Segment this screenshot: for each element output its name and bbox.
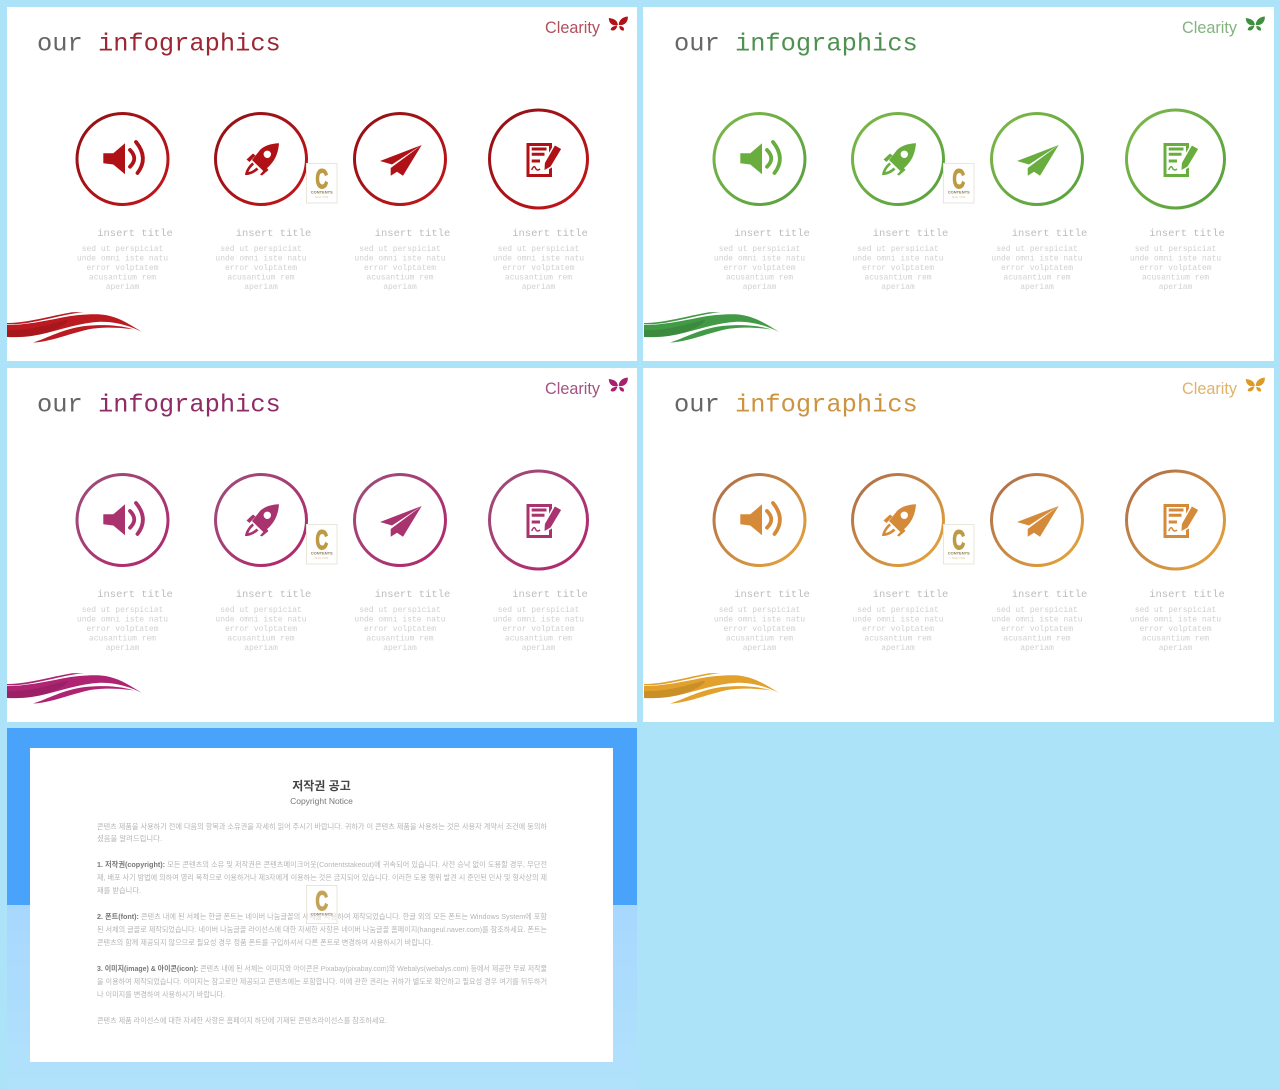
item text: sed ut perspiciat <box>1135 245 1216 254</box>
icon circle <box>77 474 168 566</box>
icon circle <box>992 474 1082 566</box>
item text: unde omni iste natu <box>77 255 168 264</box>
watermark: CONTENTS <box>311 912 333 916</box>
item text: acusantium rem <box>227 634 295 643</box>
item text: error volptatem <box>364 264 436 273</box>
item text: sed ut perspiciat <box>220 245 302 254</box>
item text: acusantium rem <box>1142 273 1209 282</box>
item text: unde omni iste natu <box>991 255 1083 264</box>
item title: insert title <box>375 589 450 601</box>
icon circle <box>490 471 588 569</box>
notice body text: 3. 이미지(image) & 아이콘(icon): 콘텐츠 내에 된 서체는 이미지와 아이콘은 Pixabay(pixabay.com)와 Webalys(webalys.com) 등에서 제공한 무료 저작물 <box>97 964 547 973</box>
logo icon <box>609 16 628 31</box>
item text: aperiam <box>881 644 915 653</box>
item text: sed ut perspiciat <box>359 245 441 254</box>
item title: insert title <box>236 228 311 240</box>
item 1: speaker <box>714 114 810 292</box>
notice body text: 콘텐츠 제품을 사용하기 전에 다음의 항목과 소유권을 자세히 읽어 주시기 바랍니다. 귀하가 이 콘텐츠 제품을 사용하는 것은 사용자 계약서 조건에 동의하 <box>97 822 547 831</box>
notice body text: 셨음을 알려드립니다. <box>97 834 162 843</box>
item text: aperiam <box>1020 283 1054 292</box>
item text: unde omni iste natu <box>354 255 446 264</box>
item text: error volptatem <box>1139 264 1212 273</box>
panel: red slide <box>7 7 637 361</box>
item title: insert title <box>873 589 948 601</box>
item text: sed ut perspiciat <box>719 245 800 254</box>
item title: insert title <box>1012 589 1087 601</box>
item text: unde omni iste natu <box>354 616 446 625</box>
title: our infographics <box>37 390 281 420</box>
item title: insert title <box>1149 589 1225 601</box>
notice body text: 1. 저작권(copyright): 모든 콘텐츠의 소유 및 저작권은 콘텐츠메이크어웃(Contentstakeout)에 귀속되어 있습니다. 사전 승낙 없이 도용할 경우, 무단전 <box>97 860 547 869</box>
item text: aperiam <box>106 283 140 292</box>
icon: rocket <box>245 504 279 536</box>
item text: error volptatem <box>723 264 796 273</box>
item text: error volptatem <box>862 625 934 634</box>
icon circle <box>216 474 306 566</box>
item text: unde omni iste natu <box>1130 616 1221 625</box>
item text: error volptatem <box>502 264 575 273</box>
item text: aperiam <box>244 283 278 292</box>
item text: aperiam <box>881 283 915 292</box>
item text: acusantium rem <box>366 634 434 643</box>
notice body text: 콘텐츠의 함께 제공되지 않으므로 필요성 경우 정품 폰트를 구입하셔서 다른 폰트로 변경하여 사용하시기 바랍니다. <box>97 938 433 947</box>
icon circle <box>852 474 944 566</box>
icon: paper plane <box>1017 506 1059 537</box>
icon circle <box>714 474 805 566</box>
icon circle <box>490 110 588 208</box>
item text: sed ut perspiciat <box>857 245 939 254</box>
swoosh <box>7 673 142 704</box>
icon circle <box>216 114 306 204</box>
item text: unde omni iste natu <box>493 616 584 625</box>
item text: unde omni iste natu <box>852 255 944 264</box>
swoosh <box>7 312 142 342</box>
logo text: Clearity <box>1182 18 1237 37</box>
icon: paper plane <box>1017 145 1059 176</box>
item title: insert title <box>1012 228 1087 240</box>
icon circle <box>852 114 944 204</box>
item text: aperiam <box>522 644 556 653</box>
title: our infographics <box>674 390 918 420</box>
watermark: C <box>316 886 328 916</box>
item 2: rocket <box>852 474 948 653</box>
item text: aperiam <box>383 283 417 292</box>
item 3: paper plane <box>354 474 450 653</box>
item text: error volptatem <box>86 264 159 273</box>
notice heading: 저작권 공고 <box>292 778 351 793</box>
icon: document <box>1164 143 1198 177</box>
item text: sed ut perspiciat <box>498 606 579 615</box>
item text: aperiam <box>1159 644 1192 653</box>
item text: sed ut perspiciat <box>498 245 579 254</box>
item text: sed ut perspiciat <box>220 606 302 615</box>
watermark <box>306 164 337 203</box>
item text: error volptatem <box>723 625 796 634</box>
item title: insert title <box>734 228 810 240</box>
item text: acusantium rem <box>726 634 793 643</box>
item 3: paper plane <box>354 114 450 292</box>
item 4: document <box>1126 471 1225 653</box>
item text: error volptatem <box>86 625 159 634</box>
item text: acusantium rem <box>864 634 932 643</box>
item text: sed ut perspiciat <box>82 606 163 615</box>
item text: error volptatem <box>1139 625 1212 634</box>
icon: speaker <box>740 142 780 174</box>
icon circle <box>992 114 1082 204</box>
logo text: Clearity <box>1182 379 1237 398</box>
notice body text: 재를 받습니다. <box>97 886 141 895</box>
item title: insert title <box>97 228 173 240</box>
icon: rocket <box>245 143 279 176</box>
logo icon <box>1246 378 1265 392</box>
logo text: Clearity <box>545 18 600 37</box>
item text: aperiam <box>743 283 776 292</box>
item text: unde omni iste natu <box>714 255 805 264</box>
logo icon <box>609 378 628 392</box>
item text: acusantium rem <box>89 273 156 282</box>
item 1: speaker <box>714 474 810 653</box>
item text: acusantium rem <box>366 273 434 282</box>
item text: sed ut perspiciat <box>996 245 1078 254</box>
item 4: document <box>490 110 588 292</box>
item text: aperiam <box>1159 283 1192 292</box>
item text: acusantium rem <box>505 273 572 282</box>
icon: rocket <box>882 143 916 176</box>
icon circle <box>714 114 805 204</box>
item text: aperiam <box>383 644 417 653</box>
icon: speaker <box>103 503 143 535</box>
item title: insert title <box>97 589 173 601</box>
item 2: rocket <box>215 474 311 653</box>
icon circle <box>77 114 168 204</box>
item text: unde omni iste natu <box>714 616 805 625</box>
item text: acusantium rem <box>1003 634 1071 643</box>
item text: acusantium rem <box>864 273 932 282</box>
notice body text: 콘텐츠 제품 라이선스에 대한 자세한 사항은 홈페이지 하단에 기재된 콘텐츠라이선스를 참조하세요. <box>97 1016 387 1025</box>
item text: acusantium rem <box>227 273 295 282</box>
icon circle <box>354 114 446 204</box>
icon: paper plane <box>380 145 422 176</box>
item text: unde omni iste natu <box>493 255 584 264</box>
item text: unde omni iste natu <box>991 616 1083 625</box>
item text: error volptatem <box>225 625 297 634</box>
item 2: rocket <box>852 114 948 292</box>
item text: sed ut perspiciat <box>1135 606 1216 615</box>
notice body text <box>97 822 547 1025</box>
item title: insert title <box>1149 228 1225 240</box>
item text: aperiam <box>106 644 140 653</box>
watermark <box>944 524 974 564</box>
logo text: Clearity <box>545 379 600 398</box>
item text: error volptatem <box>502 625 575 634</box>
watermark <box>944 164 974 203</box>
notice body text: 을 이용하여 제작되었습니다. 이미지는 참고로만 제공되고 콘텐츠에는 포함합니다. 이에 관한 권리는 귀하가 별도로 확인하고 필요성 경우 여기를 뒤두하거 <box>97 977 547 986</box>
item 1: speaker <box>77 474 173 653</box>
icon: speaker <box>103 142 143 174</box>
icon circle <box>1126 110 1224 208</box>
item title: insert title <box>734 589 810 601</box>
item text: acusantium rem <box>1003 273 1071 282</box>
item 3: paper plane <box>991 114 1087 292</box>
swoosh <box>644 673 779 704</box>
item text: sed ut perspiciat <box>359 606 441 615</box>
item text: unde omni iste natu <box>215 255 307 264</box>
item title: insert title <box>512 228 588 240</box>
icon: document <box>526 504 561 538</box>
logo icon <box>1246 16 1265 31</box>
item text: acusantium rem <box>1142 634 1209 643</box>
swoosh <box>644 312 779 342</box>
item text: aperiam <box>522 283 556 292</box>
item text: acusantium rem <box>726 273 793 282</box>
item text: aperiam <box>1020 644 1054 653</box>
item text: error volptatem <box>364 625 436 634</box>
item 1: speaker <box>77 114 173 292</box>
notice body text: 2. 폰트(font): 콘텐츠 내에 된 서체는 한글 폰트는 네이버 나눔글꼴의 서체를 사용하여 제작되었습니다. 한글 외의 모든 폰트는 Windows System에 포함 <box>97 912 547 921</box>
item text: sed ut perspiciat <box>857 606 939 615</box>
icon: speaker <box>740 503 780 535</box>
item 2: rocket <box>215 114 311 292</box>
item text: unde omni iste natu <box>215 616 307 625</box>
notice body text: 된 서체의 글꼴로 제작되었습니다. 네이버 나눔글꼴 라이선스에 대한 자세한 사항은 네이버 나눔글꼴 홈페이지(hangeul.naver.com)를 참조하세요. 폰트는 <box>97 925 547 934</box>
item text: unde omni iste natu <box>1130 255 1221 264</box>
item 4: document <box>490 471 588 653</box>
item text: unde omni iste natu <box>77 616 168 625</box>
notice body text: 나 이미지를 변경하여 사용하시기 바랍니다. <box>97 990 225 999</box>
item text: error volptatem <box>862 264 934 273</box>
panel: magenta slide <box>7 368 637 722</box>
item title: insert title <box>236 589 311 601</box>
icon: rocket <box>882 504 916 536</box>
icon: document <box>526 143 561 177</box>
item title: insert title <box>375 228 450 240</box>
item text: aperiam <box>244 644 278 653</box>
title: our infographics <box>37 30 281 58</box>
item text: aperiam <box>743 644 776 653</box>
item text: unde omni iste natu <box>852 616 944 625</box>
item 3: paper plane <box>991 474 1087 653</box>
item text: sed ut perspiciat <box>719 606 800 615</box>
panel: orange slide <box>643 368 1274 722</box>
watermark <box>306 524 337 564</box>
icon circle <box>1126 471 1224 569</box>
item 4: document <box>1126 110 1225 292</box>
panel: green slide <box>643 7 1274 361</box>
item title: insert title <box>512 589 588 601</box>
item text: error volptatem <box>1001 264 1073 273</box>
icon: document <box>1164 504 1198 538</box>
item text: error volptatem <box>1001 625 1073 634</box>
item text: sed ut perspiciat <box>996 606 1078 615</box>
icon: paper plane <box>380 506 422 537</box>
panel: copyright notice <box>7 728 637 1089</box>
item text: acusantium rem <box>89 634 156 643</box>
notice subheading: Copyright Notice <box>290 796 353 806</box>
notice body text: 재, 배포 사기 방법에 의하여 영리 목적으로 이용하거나 제3자에게 이용하는 것은 금지되어 있습니다. 이러한 도용 행위 발견 시 준민된 민사 및 형사상의 제 <box>97 873 547 882</box>
item text: acusantium rem <box>505 634 572 643</box>
item text: error volptatem <box>225 264 297 273</box>
watermark <box>306 886 337 924</box>
title: our infographics <box>674 30 918 58</box>
item text: sed ut perspiciat <box>82 245 163 254</box>
icon circle <box>354 474 446 566</box>
item title: insert title <box>873 228 948 240</box>
